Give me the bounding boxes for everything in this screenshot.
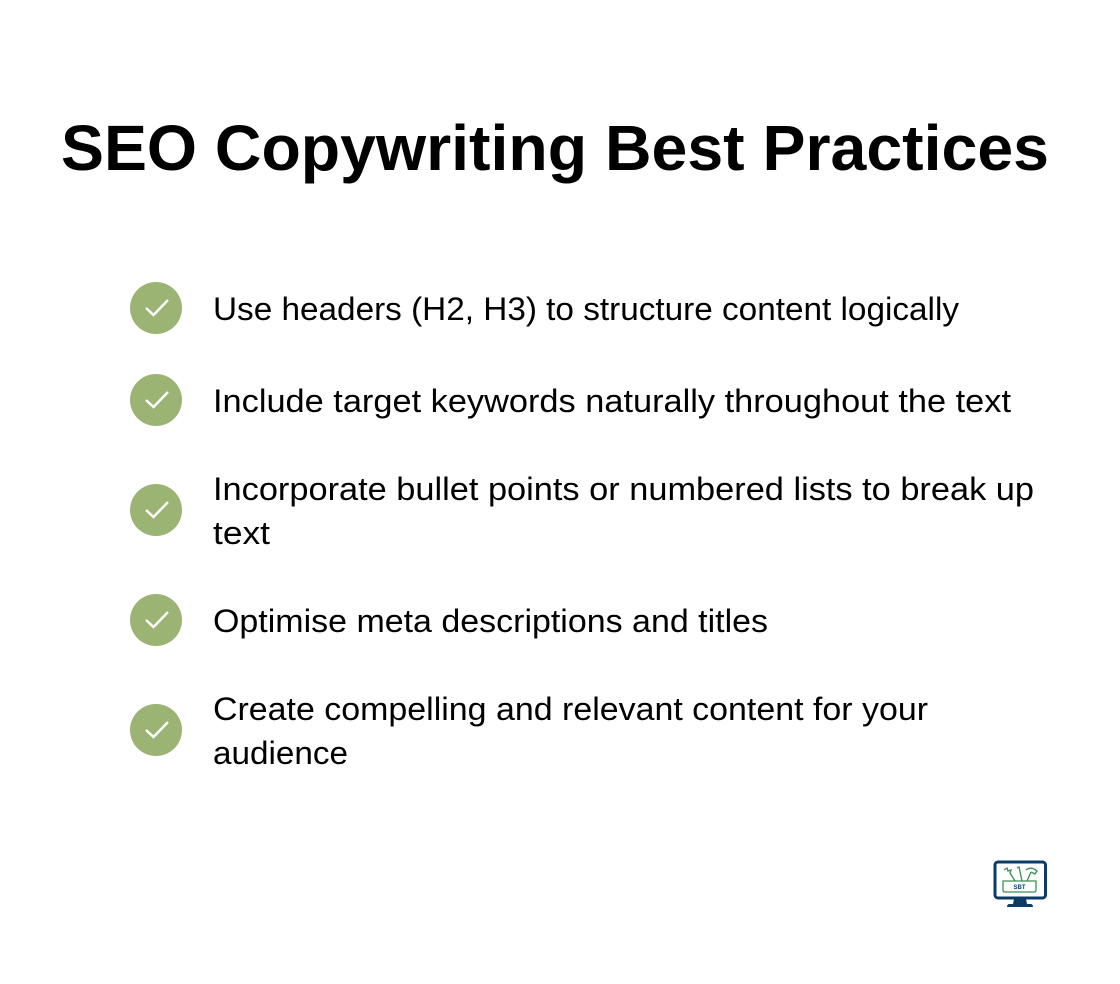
item 3 [130,471,1034,551]
item 4: Optimise meta descriptions and titles [213,603,768,639]
checklist [130,282,1034,771]
item 4 [130,594,768,646]
item 5: Create compelling and relevant content for your [213,691,928,727]
logo text: SBT [1014,885,1026,891]
item 1 [130,282,959,334]
item 2 [130,374,1011,426]
icon: SBT computer monitor logo [995,862,1046,907]
item 2: Include target keywords naturally throughout the text [213,383,1011,419]
item 3: text [213,515,270,551]
item 5 [130,691,928,771]
item 5: audience [213,735,348,771]
title: SEO Copywriting Best Practices [61,112,1049,184]
item 1: Use headers (H2, H3) to structure content logically [213,291,959,327]
item 3: Incorporate bullet points or numbered lists to break up [213,471,1034,507]
